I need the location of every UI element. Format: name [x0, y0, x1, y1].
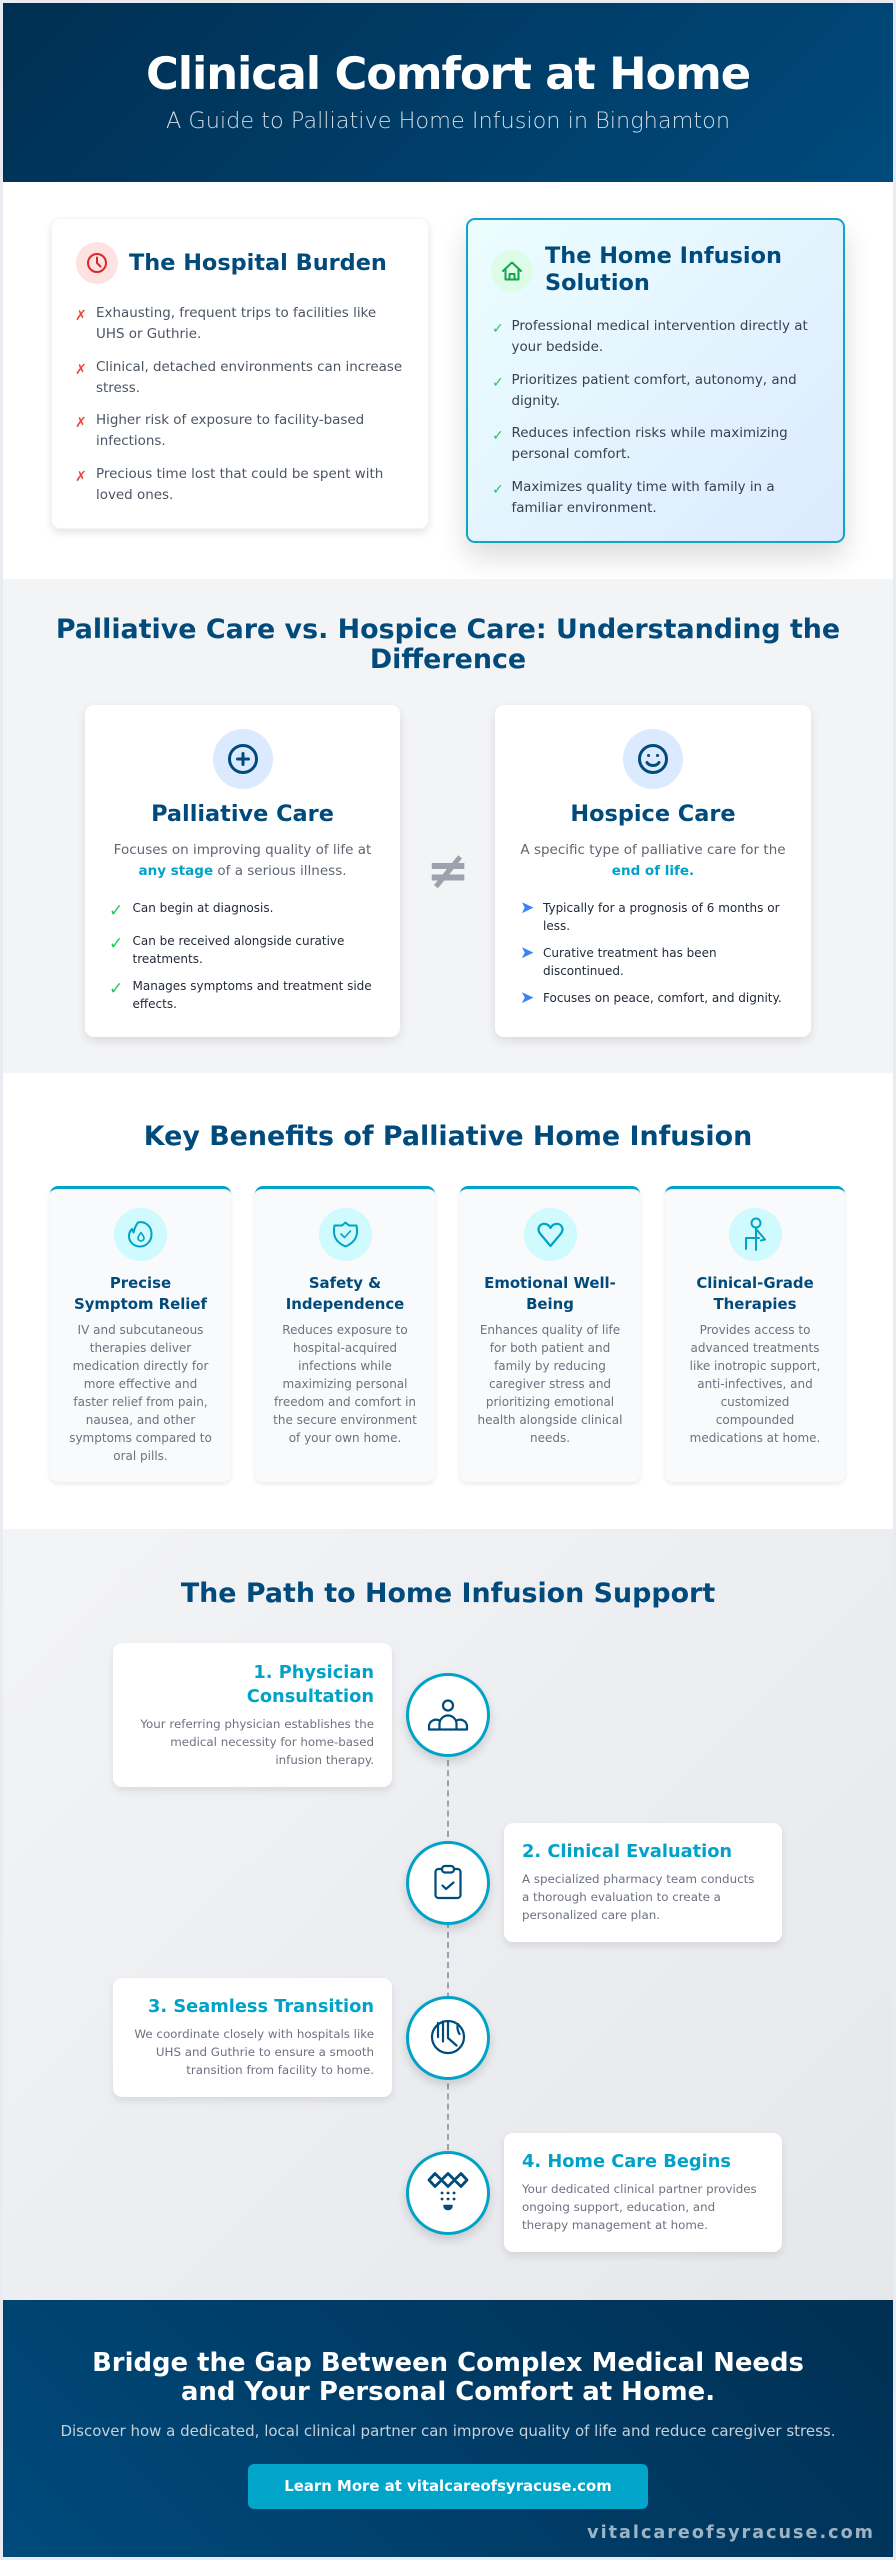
- list item: effects.: [132, 997, 177, 1011]
- step text: A specialized pharmacy team conducts: [522, 1872, 754, 1886]
- list item: [492, 426, 788, 462]
- card text: maximizing personal: [282, 1376, 408, 1390]
- card text: medications at home.: [690, 1430, 820, 1444]
- list item: [492, 319, 808, 355]
- list item: infections.: [96, 434, 166, 449]
- step text: a thorough evaluation to create a: [522, 1890, 721, 1904]
- panel: hospice care: [495, 705, 811, 1037]
- panel: path section: [3, 1529, 893, 2300]
- panel: the hospital burden: [51, 218, 429, 529]
- step 4 card: [504, 2133, 782, 2252]
- card heading: Safety &: [309, 1274, 381, 1292]
- step text: therapy management at home.: [522, 2218, 708, 2232]
- heading: palliative care: Palliative Care: [151, 801, 334, 827]
- title: Clinical Comfort at Home: [146, 46, 750, 100]
- list: home infusion points: [492, 319, 808, 516]
- panel: intro section background: [3, 182, 893, 579]
- card text: like inotropic support,: [690, 1358, 820, 1372]
- step 1 node: physician icon: [406, 1673, 490, 1757]
- list item: [109, 979, 372, 1011]
- heading: the hospital burden: The Hospital Burden: [129, 250, 387, 276]
- card text: Reduces exposure to: [282, 1322, 408, 1336]
- list item: ✓: [109, 901, 123, 921]
- card heading: [286, 1274, 404, 1313]
- panel: key benefits section: [3, 1073, 893, 1529]
- step title: 4. Home Care Begins: [522, 2151, 731, 2172]
- list item: Typically for a prognosis of 6 months or: [543, 901, 780, 915]
- timeline connector: [447, 1750, 449, 2150]
- list item: [492, 480, 775, 516]
- step 2 card: [504, 1823, 782, 1942]
- icon: plus circle: [212, 729, 272, 789]
- list item: Can begin at diagnosis.: [132, 901, 273, 915]
- card heading: Independence: [286, 1295, 404, 1313]
- card text: customized: [721, 1394, 789, 1408]
- card heading: Being: [526, 1295, 574, 1313]
- description: A specific type of palliative care for the: [520, 842, 786, 858]
- card text: prioritizing emotional: [486, 1394, 614, 1408]
- card text: Enhances quality of life: [480, 1322, 620, 1336]
- list item: Professional medical intervention directly at: [512, 319, 808, 334]
- card heading: Emotional Well-: [484, 1274, 616, 1292]
- step text: [140, 1717, 374, 1767]
- step title: 2. Clinical Evaluation: [522, 1841, 732, 1862]
- step text: Your referring physician establishes the: [140, 1717, 374, 1731]
- list item: ✗: [75, 469, 87, 485]
- list: hospice points: [520, 898, 782, 1008]
- list item: your bedside.: [512, 340, 603, 355]
- footer heading: Bridge the Gap Between Complex Medical Needs: [92, 2348, 804, 2378]
- card: emotional well-being: [460, 1186, 640, 1482]
- list item: less.: [543, 919, 570, 933]
- card text: IV and subcutaneous: [78, 1322, 203, 1336]
- list item: Focuses on peace, comfort, and dignity.: [543, 991, 782, 1005]
- card text: therapies deliver: [90, 1340, 191, 1354]
- card text: more effective and: [84, 1376, 197, 1390]
- card text: health alongside clinical: [478, 1412, 622, 1426]
- card text: needs.: [530, 1430, 570, 1444]
- list item: [75, 360, 402, 396]
- panel: header banner: [3, 3, 893, 182]
- heading: the home infusion solution: [545, 242, 782, 296]
- list item: Prioritizes patient comfort, autonomy, and: [512, 373, 797, 388]
- list item: Precious time lost that could be spent with: [96, 467, 383, 482]
- card text: [690, 1322, 820, 1444]
- list: hospital burden points: [75, 306, 402, 503]
- footer text: Discover how a dedicated, local clinical partner can improve quality of life and reduce caregiver stress.: [60, 2422, 836, 2440]
- list item: UHS or Guthrie.: [96, 327, 201, 342]
- card text: family by reducing: [494, 1358, 606, 1372]
- list: palliative points: [109, 901, 372, 1011]
- list item: [75, 467, 383, 503]
- list item: Maximizes quality time with family in a: [512, 480, 775, 495]
- list item: dignity.: [512, 394, 560, 409]
- button: Learn More at vitalcareofsyracuse.com: [284, 2477, 612, 2495]
- list item: [75, 413, 364, 449]
- heading: the home infusion solution: Solution: [545, 270, 650, 296]
- panel: the home infusion solution: [466, 218, 845, 543]
- description: Focuses on improving quality of life at: [114, 842, 371, 858]
- heading: palliative vs hospice: Difference: [370, 644, 526, 674]
- card text: Provides access to: [700, 1322, 810, 1336]
- list item: [520, 898, 780, 933]
- list item: [520, 943, 717, 978]
- step 1 card: [113, 1643, 392, 1787]
- list item: ➤: [520, 988, 534, 1008]
- list item: loved ones.: [96, 488, 173, 503]
- step 4 node: home care icon: [406, 2151, 490, 2235]
- list item: [109, 901, 273, 921]
- card text: symptoms compared to: [69, 1430, 212, 1444]
- step text: [522, 2182, 757, 2232]
- step title: [247, 1662, 374, 1707]
- card: safety and independence: [255, 1186, 435, 1482]
- step text: transition from facility to home.: [186, 2063, 374, 2077]
- icon: home: [491, 250, 533, 292]
- list item: ✓: [109, 979, 123, 999]
- list item: treatments.: [132, 952, 203, 966]
- card text: advanced treatments: [691, 1340, 819, 1354]
- list item: Can be received alongside curative: [132, 934, 344, 948]
- list item: Curative treatment has been: [543, 946, 717, 960]
- icon: smiley face: [623, 729, 683, 789]
- description: any stage of a serious illness.: [138, 863, 347, 879]
- list item: stress.: [96, 381, 140, 396]
- heading: path to home infusion: The Path to Home Infusion Support: [181, 1578, 715, 1608]
- card text: infections while: [298, 1358, 392, 1372]
- list item: ✗: [75, 308, 87, 324]
- heading: palliative vs hospice: [56, 614, 840, 674]
- list item: Exhausting, frequent trips to facilities like: [96, 306, 376, 321]
- step text: Your dedicated clinical partner provides: [522, 2182, 757, 2196]
- card heading: [74, 1274, 208, 1313]
- card text: compounded: [716, 1412, 794, 1426]
- icon: not equal sign: ≠: [426, 841, 470, 901]
- card text: hospital-acquired: [293, 1340, 397, 1354]
- list item: Higher risk of exposure to facility-based: [96, 413, 364, 428]
- heading: the home infusion solution: The Home Infusion: [545, 242, 782, 268]
- list item: personal comfort.: [512, 447, 631, 462]
- list item: ✓: [492, 321, 504, 337]
- list item: ✓: [492, 375, 504, 391]
- step text: UHS and Guthrie to ensure a smooth: [156, 2045, 374, 2059]
- card text: nausea, and other: [86, 1412, 195, 1426]
- card heading: [484, 1274, 616, 1313]
- list item: ✗: [75, 415, 87, 431]
- panel: palliative care: [85, 705, 400, 1037]
- card text: of your own home.: [289, 1430, 401, 1444]
- card text: oral pills.: [113, 1448, 168, 1462]
- card text: medication directly for: [73, 1358, 208, 1372]
- card text: for both patient and: [490, 1340, 610, 1354]
- list item: [520, 988, 782, 1008]
- step text: ongoing support, education, and: [522, 2200, 715, 2214]
- card heading: [696, 1274, 814, 1313]
- icon: shield check: [318, 1208, 372, 1260]
- step title: 1. Physician: [253, 1662, 374, 1683]
- step title: 3. Seamless Transition: [148, 1996, 374, 2017]
- panel: palliative vs hospice section: [3, 579, 893, 1073]
- card heading: Clinical-Grade: [696, 1274, 814, 1292]
- description: end of life.: [612, 863, 694, 879]
- list item: Reduces infection risks while maximizing: [512, 426, 788, 441]
- step 3 node: clock and hand icon: [406, 1996, 490, 2080]
- footer heading: and Your Personal Comfort at Home.: [181, 2377, 715, 2407]
- list item: [492, 373, 797, 409]
- list item: ✓: [492, 428, 504, 444]
- step text: [522, 1872, 754, 1922]
- icon: flame with drop: [114, 1208, 167, 1260]
- card: clinical-grade therapies: [665, 1186, 845, 1482]
- list item: ✗: [75, 362, 87, 378]
- card text: anti-infectives, and: [697, 1376, 813, 1390]
- description: [114, 842, 371, 879]
- footer heading: [92, 2348, 804, 2407]
- panel: footer call to action: [3, 2300, 893, 2557]
- list item: familiar environment.: [512, 501, 657, 516]
- description: [520, 842, 786, 879]
- list item: ➤: [520, 898, 534, 918]
- list item: Manages symptoms and treatment side: [132, 979, 372, 993]
- step text: We coordinate closely with hospitals like: [134, 2027, 374, 2041]
- card heading: Symptom Relief: [74, 1295, 207, 1313]
- card heading: Therapies: [714, 1295, 796, 1313]
- card text: [478, 1322, 622, 1444]
- step 2 node: clipboard icon: [406, 1841, 490, 1925]
- icon: seated person: [728, 1208, 782, 1260]
- list item: ✓: [109, 934, 123, 954]
- icon: heart: [524, 1208, 576, 1260]
- heading: key benefits: Key Benefits of Palliative Home Infusion: [144, 1120, 752, 1152]
- list item: ✓: [492, 482, 504, 498]
- card text: freedom and comfort in: [274, 1394, 416, 1408]
- heading: palliative vs hospice: Palliative Care vs. Hospice Care: Understanding the: [56, 614, 840, 645]
- card text: [273, 1322, 417, 1444]
- step 3 card: [113, 1978, 392, 2097]
- subtitle: A Guide to Palliative Home Infusion in Binghamton: [166, 108, 730, 134]
- card text: [69, 1322, 212, 1462]
- step title: Consultation: [247, 1686, 374, 1707]
- button: [248, 2464, 648, 2509]
- list item: [75, 306, 376, 342]
- card text: caregiver stress and: [489, 1376, 611, 1390]
- step text: [134, 2027, 374, 2077]
- website watermark: vitalcareofsyracuse.com: [587, 2523, 875, 2543]
- card: precise symptom relief: [50, 1186, 231, 1482]
- heading: hospice care: Hospice Care: [570, 801, 736, 827]
- icon: clock: [76, 242, 118, 284]
- list item: ➤: [520, 943, 534, 963]
- list item: discontinued.: [543, 964, 624, 978]
- step text: infusion therapy.: [275, 1753, 374, 1767]
- list item: Clinical, detached environments can increase: [96, 360, 402, 375]
- step text: medical necessity for home-based: [170, 1735, 374, 1749]
- card heading: Precise: [110, 1274, 171, 1292]
- list item: [109, 934, 344, 966]
- card text: the secure environment: [273, 1412, 417, 1426]
- step text: personalized care plan.: [522, 1908, 660, 1922]
- card text: faster relief from pain,: [73, 1394, 208, 1408]
